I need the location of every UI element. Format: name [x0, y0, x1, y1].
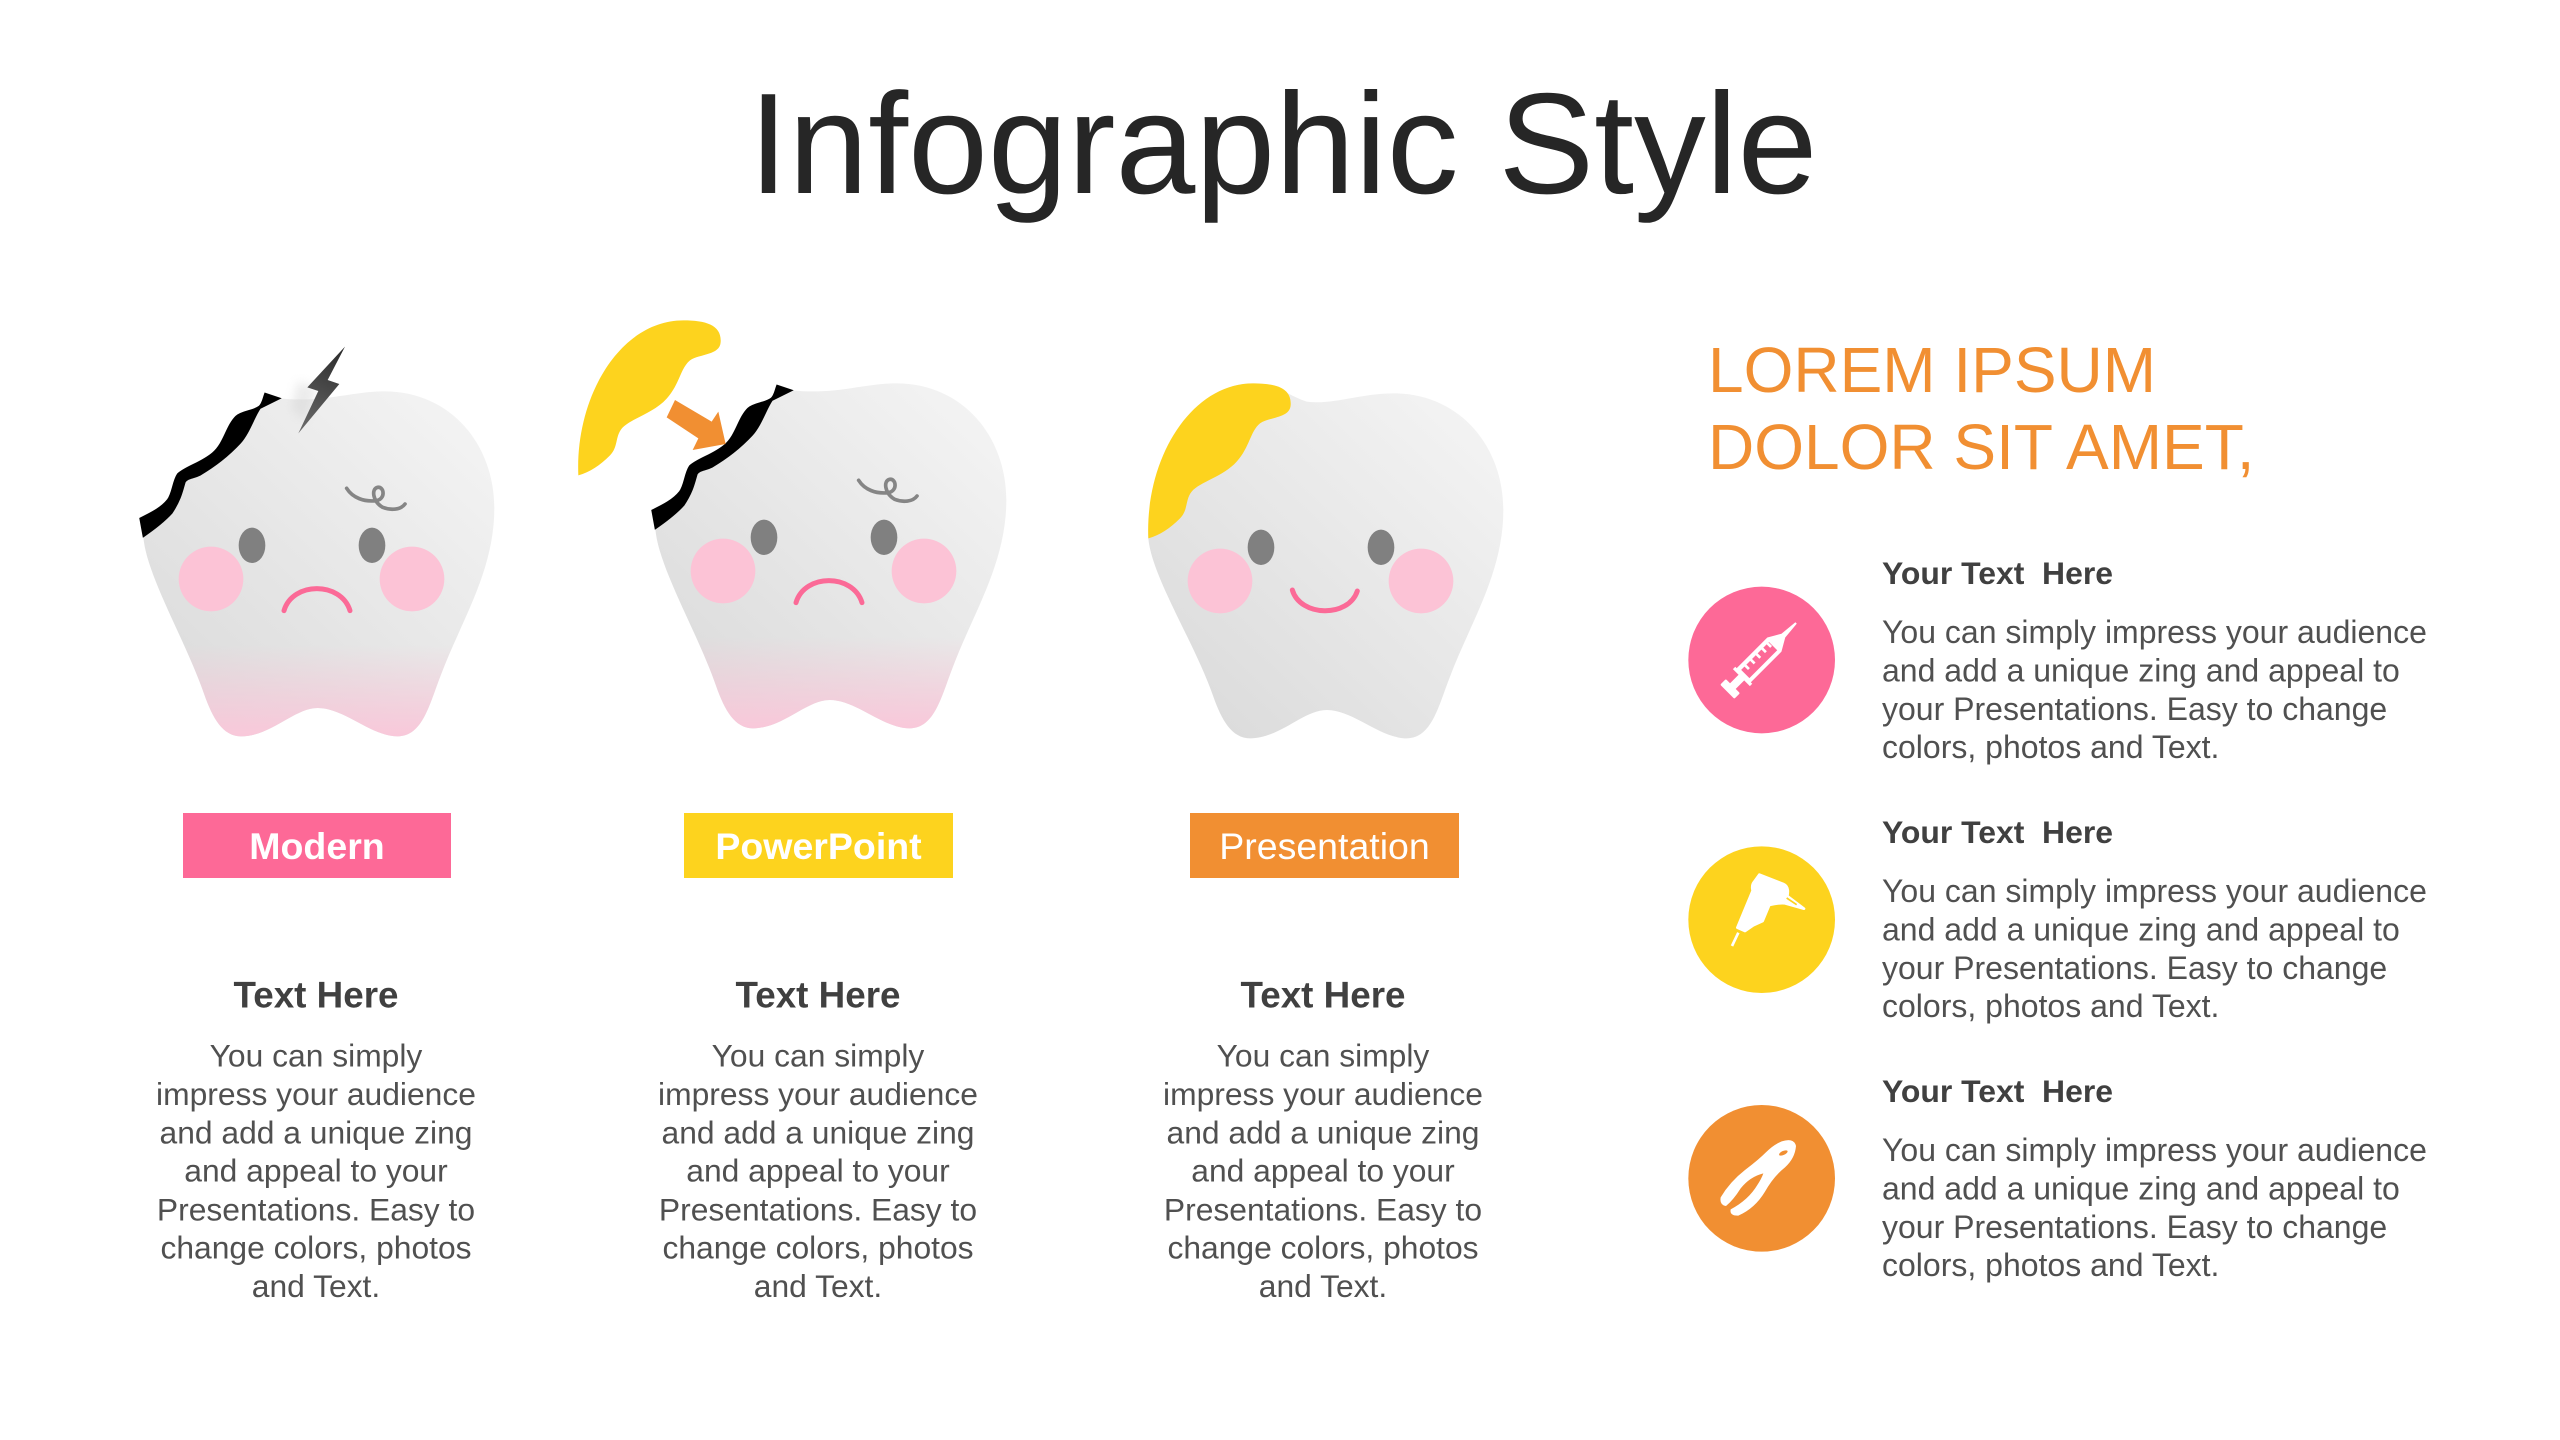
text block: column 1: change colors, photos [160, 1230, 472, 1266]
worried brow [347, 487, 405, 509]
text block: column 3: change colors, photos [1167, 1230, 1479, 1266]
text block: column 2: You can simply [712, 1038, 924, 1074]
label: Presentation [1190, 813, 1459, 878]
heading: lorem ipsum: DOLOR SIT AMET, [1708, 411, 2254, 483]
text block: right item 2: Your Text Here [1882, 814, 2113, 850]
text block: right item 1: your Presentations. Easy to change [1882, 691, 2387, 727]
black crack [652, 385, 792, 529]
text block: right item 2: and add a unique zing and appeal to [1882, 912, 2400, 948]
text block: right item 1: Your Text Here [1882, 555, 2113, 591]
black crack [140, 393, 280, 537]
text block: column 1: and add a unique zing [160, 1114, 472, 1150]
tooth body [143, 391, 494, 736]
cheeks [179, 547, 444, 611]
text block: right item 3: and add a unique zing and appeal to [1882, 1170, 2400, 1206]
title: Infographic Style [749, 64, 1817, 224]
text block: column 3: You can simply [1217, 1038, 1429, 1074]
label: PowerPoint [684, 813, 953, 878]
frown [796, 581, 862, 603]
text block: column 3: Presentations. Easy to [1164, 1192, 1482, 1228]
text block: column 2: and Text. [754, 1268, 882, 1304]
bolt shadow [291, 381, 318, 421]
smile [1292, 590, 1357, 611]
text block: right item 2: your Presentations. Easy to change [1882, 950, 2387, 986]
cheeks [1188, 549, 1453, 613]
text block: right item 1: You can simply impress your audience [1882, 614, 2427, 650]
text block: right item 2 [1882, 814, 2427, 1024]
text block: column 1: and Text. [252, 1268, 380, 1304]
tooth: with broken piece and arrow [652, 383, 1006, 728]
text block: column 1: Presentations. Easy to [157, 1192, 475, 1228]
text block: column 2: and add a unique zing [662, 1114, 974, 1150]
label: Modern: Modern [249, 825, 385, 867]
eyes [1248, 530, 1394, 565]
text block: column 2: impress your audience [658, 1076, 978, 1112]
tooth body [1148, 383, 1503, 738]
text block: column 2: Presentations. Easy to [659, 1192, 977, 1228]
text block: column 2 [658, 974, 978, 1304]
text block: column 3: and add a unique zing [1167, 1114, 1479, 1150]
text block: column 2: and appeal to your [686, 1152, 950, 1188]
cheeks [691, 539, 956, 603]
text block: column 3: impress your audience [1163, 1076, 1483, 1112]
text block: right item 3: your Presentations. Easy to change [1882, 1209, 2387, 1245]
eyes [239, 528, 385, 563]
text block: right item 3 [1882, 1073, 2427, 1283]
label: PowerPoint: PowerPoint [715, 825, 922, 867]
text block: column 1: and appeal to your [184, 1152, 448, 1188]
text block: right item 3: Your Text Here [1882, 1073, 2113, 1109]
text block: right item 3: colors, photos and Text. [1882, 1247, 2219, 1283]
yellow filling [1148, 383, 1291, 538]
text block: right item 1: and add a unique zing and appeal to [1882, 652, 2400, 688]
heading: lorem ipsum [1708, 334, 2254, 483]
text block: column 1: You can simply [210, 1038, 422, 1074]
text block: right item 1: colors, photos and Text. [1882, 729, 2219, 765]
text block: column 3: and Text. [1259, 1268, 1387, 1304]
text block: column 1: Text Here [234, 974, 398, 1016]
label: Modern [183, 813, 451, 878]
text block: right item 3: You can simply impress your audience [1882, 1132, 2427, 1168]
tooth body [655, 383, 1006, 728]
icon: forceps on orange circle [1688, 1105, 1835, 1252]
broken yellow tooth piece [578, 320, 721, 475]
frown [284, 589, 350, 611]
tooth: cracked with lightning bolt [140, 347, 494, 736]
text block: column 1 [156, 974, 476, 1304]
worried brow [859, 479, 917, 501]
text block: right item 1 [1882, 555, 2427, 765]
text block: column 2: Text Here [736, 974, 900, 1016]
eyes [751, 520, 897, 555]
tooth: healthy with yellow filling [1148, 383, 1503, 738]
icon: dental drill on yellow circle [1688, 846, 1835, 993]
lightning bolt [298, 347, 345, 433]
text block: column 1: impress your audience [156, 1076, 476, 1112]
text block: column 3: Text Here [1241, 974, 1405, 1016]
text block: right item 2: colors, photos and Text. [1882, 988, 2219, 1024]
text block: column 3: and appeal to your [1191, 1152, 1455, 1188]
heading: lorem ipsum: LOREM IPSUM [1708, 334, 2156, 406]
arrow: orange pointing to crack [667, 400, 726, 450]
text block: column 2: change colors, photos [662, 1230, 974, 1266]
text block: right item 2: You can simply impress your audience [1882, 873, 2427, 909]
label: Presentation: Presentation [1219, 825, 1430, 867]
text block: column 3 [1163, 974, 1483, 1304]
icon: syringe on pink circle [1688, 587, 1835, 733]
